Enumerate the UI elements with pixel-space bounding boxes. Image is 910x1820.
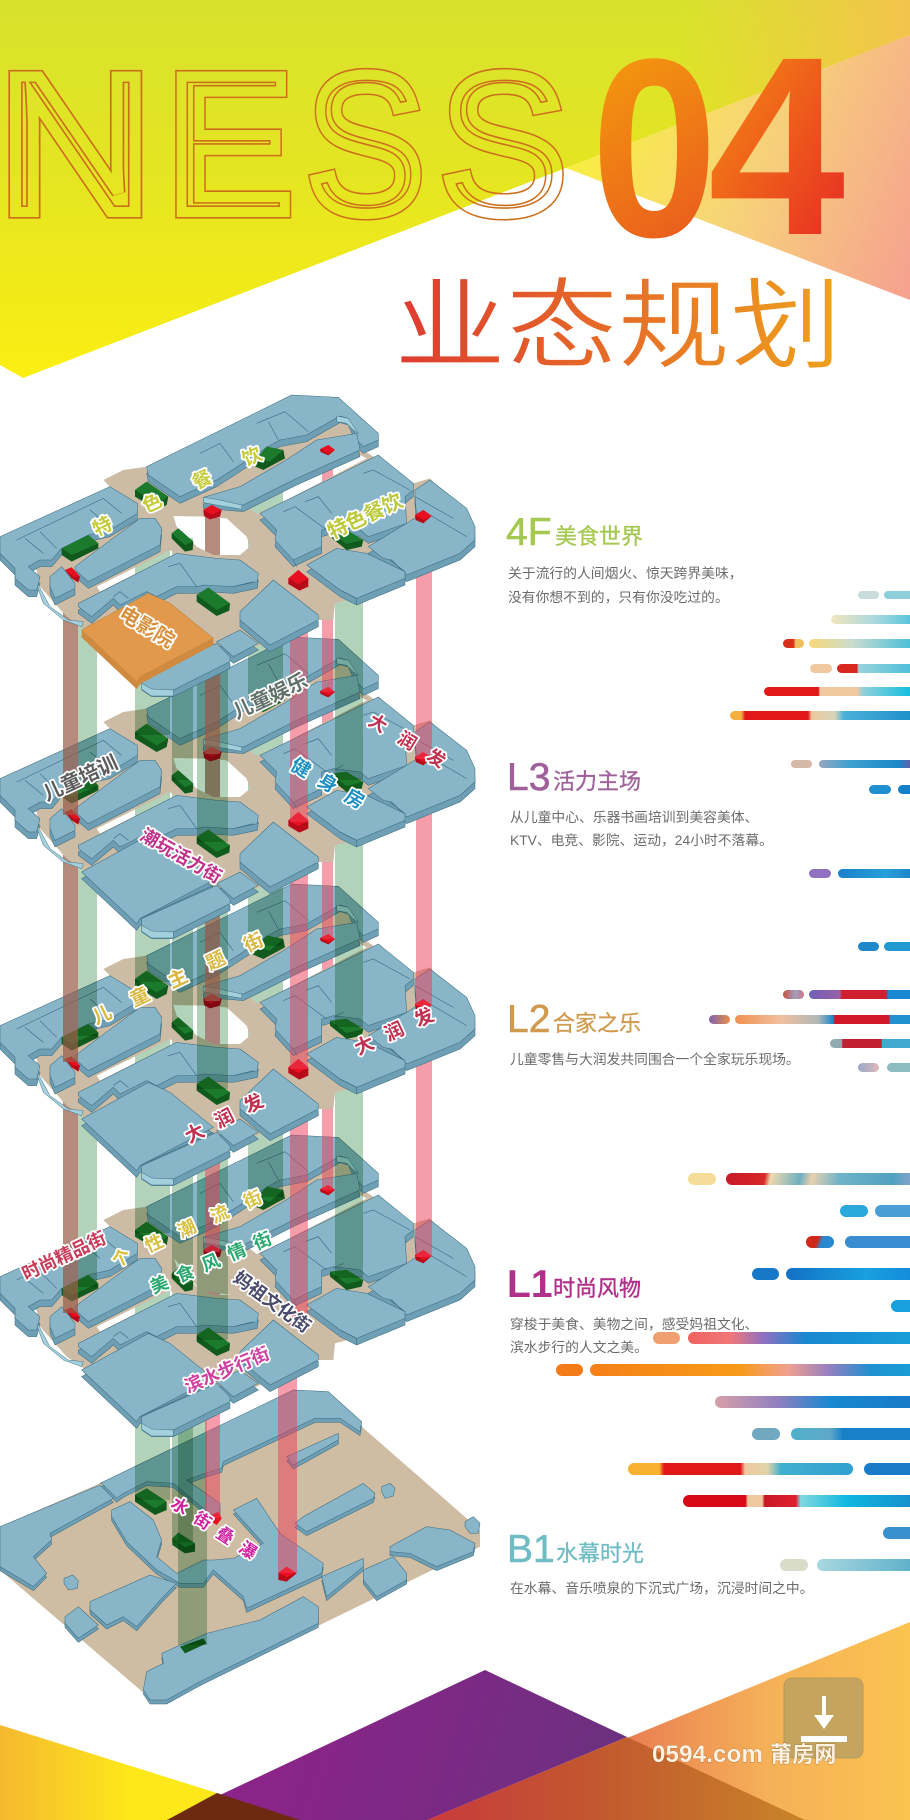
section: L1 时尚风物: [507, 1263, 758, 1355]
section: B1 水幕时光: 水幕时光: [556, 1541, 644, 1566]
background: top yellow band: [0, 0, 910, 378]
section: L3 活力主场: 活力主场: [553, 769, 641, 794]
section: B1 水幕时光: 在水幕、音乐喷泉的下沉式广场，沉浸时间之中。: [510, 1580, 814, 1596]
section: B1 水幕时光: [507, 1528, 814, 1596]
floor labels: L2: 大润发: [351, 997, 450, 1060]
floor labels: L1: 个性潮流街: [109, 1180, 282, 1271]
floor labels: 4F: 特色餐饮: [89, 428, 298, 541]
floor labels: L2: [88, 918, 450, 1148]
floor labels: L1: 妈祖文化街: [230, 1267, 315, 1337]
section: 4F 美食世界: 关于流行的人间烟火、惊天跨界美味，: [508, 566, 743, 581]
section: L3 活力主场: KTV、电竞、影院、运动，24小时不落幕。: [510, 832, 773, 848]
section: L1 时尚风物: 滨水步行的人文之美。: [510, 1340, 648, 1355]
heading: 业态规划: 业态规划: [394, 272, 842, 381]
floor B1 plan: [0, 1390, 480, 1704]
floor labels: 4F: 电影院: [115, 601, 179, 653]
icon: download button: [784, 1678, 863, 1758]
watermark: 莆房网: [770, 1742, 837, 1767]
background: peach triangle: [566, 35, 910, 300]
floor labels: B1: 水街叠瀑: [167, 1494, 268, 1569]
section: 4F 美食世界: [506, 511, 743, 605]
floor L2 plan: [0, 884, 475, 1186]
section: 4F 美食世界: 4F: [506, 511, 552, 554]
section: L1 时尚风物: 时尚风物: [553, 1276, 641, 1301]
heading: outlined NESS: [8, 68, 564, 220]
section: B1 水幕时光: B1: [507, 1528, 555, 1571]
background: top right orange corner: [680, 0, 910, 124]
heading: number 04: 0: [591, 6, 718, 291]
floor labels: L1: 美食风情街: [147, 1224, 284, 1298]
floor labels: L3: 大润发: [365, 709, 463, 780]
section: L1 时尚风物: 穿梭于美食、美物之间，感受妈祖文化、: [510, 1316, 758, 1332]
floor labels: L3: 儿童娱乐: [229, 668, 311, 724]
heading: number 04: 4: [708, 4, 845, 289]
columns between L1 and B1: [135, 1233, 297, 1645]
floor L1 plan: [0, 1135, 475, 1437]
section: L3 活力主场: [507, 756, 773, 848]
watermark: 0594.com: [652, 1741, 763, 1768]
columns between 4F and L3: [63, 450, 432, 842]
section: L3 活力主场: L3: [507, 756, 550, 799]
section: 4F 美食世界: 美食世界: [555, 524, 643, 549]
section: 4F 美食世界: 没有你想不到的，只有你没吃过的。: [508, 590, 729, 605]
floor labels: L2: 大润发: [181, 1083, 280, 1148]
floor labels: L3: [39, 668, 463, 887]
floor 4F plan: [0, 395, 475, 697]
floor labels: L1: 滨水步行街: [181, 1342, 272, 1397]
floor labels: L3: 健身房: [287, 754, 378, 820]
section: L2 合家之乐: 儿童零售与大润发共同围合一个全家玩乐现场。: [510, 1051, 800, 1067]
section: L2 合家之乐: 合家之乐: [553, 1011, 641, 1036]
background: bottom shapes: [0, 1622, 910, 1820]
columns between L2 and L1: [63, 939, 432, 1340]
floor labels: L1: 时尚精品街: [19, 1228, 109, 1284]
section: L3 活力主场: 从儿童中心、乐器书画培训到美容美体、: [510, 809, 758, 825]
floor labels: L2: 儿童主题街: [88, 918, 288, 1029]
floor L3 plan: [0, 637, 475, 939]
section: L2 合家之乐: [507, 998, 800, 1067]
floor labels: L3: 潮玩活力街: [137, 825, 225, 887]
section: L2 合家之乐: L2: [507, 998, 550, 1041]
section: L1 时尚风物: L1: [507, 1263, 553, 1306]
floor labels: 4F: 特色餐饮: [324, 489, 406, 544]
columns between L3 and L2: [63, 692, 432, 1089]
floor labels: L1: [19, 1180, 315, 1397]
floor labels: 4F: [89, 428, 406, 653]
floor labels: L3: 儿童培训: [39, 750, 121, 806]
heading: number 04: [591, 4, 845, 291]
